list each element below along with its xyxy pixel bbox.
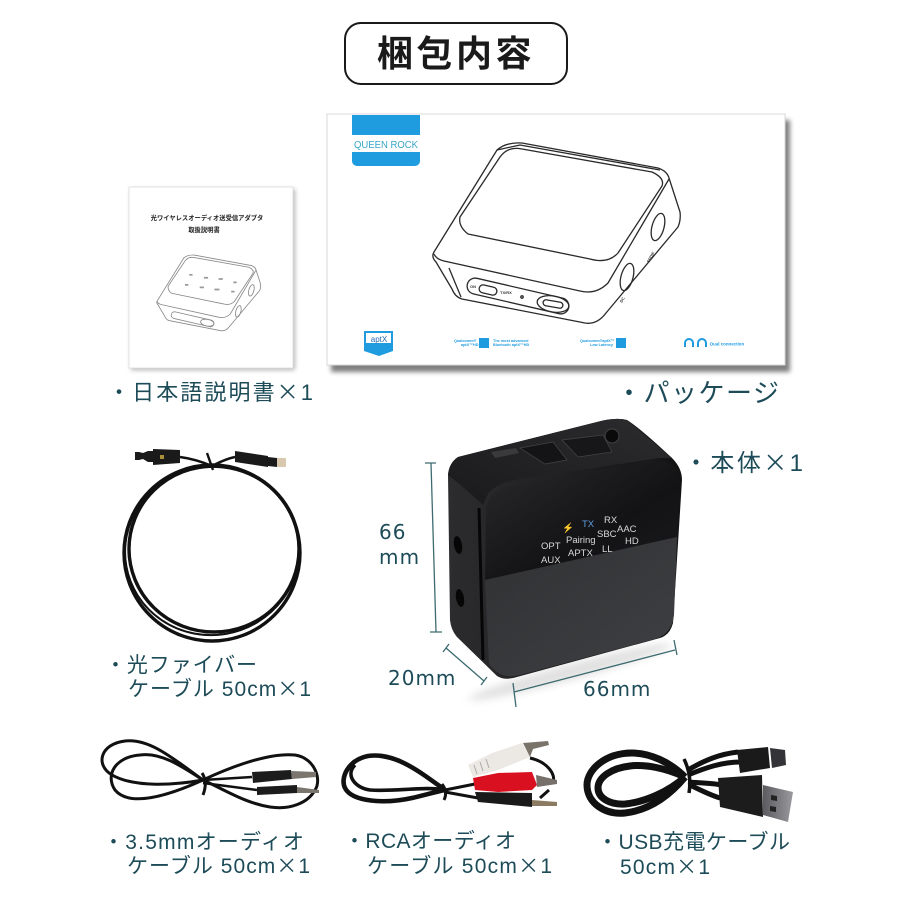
dimension: depth 20mm: 20mm <box>388 666 456 690</box>
label: package: ・パッケージ <box>616 378 779 408</box>
package port labels: ON <box>470 284 476 289</box>
label: main unit: ・本体×1 <box>684 443 803 478</box>
label: RCA cable: ケーブル 50cm×1 <box>367 850 552 880</box>
package feature logos: The most advanced <box>493 339 529 343</box>
package feature logos: Qualcomm®aptX™ <box>580 339 615 343</box>
package port labels: SPDIF <box>646 250 656 264</box>
panel: manual <box>129 187 295 370</box>
label: RCA cable: ・RCAオーディオ <box>344 830 516 853</box>
label: USB cable: ・USB充電ケーブル <box>597 831 790 854</box>
label: RCA cable <box>344 830 552 880</box>
dimension: height 66mm <box>379 463 442 632</box>
device LED labels: OPT <box>541 541 561 552</box>
package feature logos: aptX™HD <box>461 343 479 347</box>
device side and top <box>448 419 682 679</box>
package port labels <box>470 250 656 304</box>
label: 3.5mm cable: ケーブル 50cm×1 <box>127 850 310 880</box>
panel: manual: 光ワイヤレスオーディオ送受信アダプタ <box>151 213 263 222</box>
label: 3.5mm cable: ・3.5mmオーディオ <box>103 831 304 854</box>
package feature logos: Dual connection <box>710 342 744 346</box>
dimension: depth 20mm <box>388 644 487 690</box>
logo: QUEEN ROCK <box>352 115 420 166</box>
label: optical cable <box>105 654 311 703</box>
device LED labels: LL <box>602 544 613 555</box>
package feature logos: Bluetooth aptX™HD <box>493 343 530 347</box>
package line drawing of device <box>433 143 680 323</box>
label: manual: ・日本語説明書×1 <box>108 375 313 407</box>
package port labels: TX/RX <box>500 290 512 295</box>
device LED labels: TX <box>582 519 595 530</box>
dimension: width 66mm <box>513 640 677 707</box>
title: 梱包内容 <box>377 33 535 74</box>
dimension: width 66mm: 66mm <box>583 677 651 701</box>
manual line drawing of device <box>157 255 261 331</box>
RCA audio cable <box>344 741 557 807</box>
3.5mm audio cable <box>102 741 319 808</box>
panel: manual: 取扱説明書 <box>188 225 220 234</box>
title <box>345 23 567 84</box>
package port labels: DC <box>619 296 626 304</box>
dimension: height 66mm: mm <box>379 545 420 569</box>
label: USB cable <box>597 831 790 881</box>
package feature logos <box>364 331 744 356</box>
label: 3.5mm cable <box>103 831 310 880</box>
package feature logos: Low Latency <box>590 343 614 347</box>
label: optical cable: ・光ファイバー <box>105 654 257 677</box>
device LED labels: HD <box>625 536 639 547</box>
USB charging cable <box>587 747 793 822</box>
device: main unit <box>448 419 682 707</box>
device LED labels: APTX <box>568 548 593 559</box>
optical fiber cable <box>112 449 312 649</box>
package feature logos: Qualcomm® <box>454 339 477 343</box>
package feature logos: aptX <box>371 335 388 344</box>
device LED labels: Pairing <box>566 535 596 546</box>
dimension: height 66mm: 66 <box>379 520 406 544</box>
label: optical cable: ケーブル 50cm×1 <box>128 673 311 703</box>
device LED labels: AUX <box>541 555 561 566</box>
device LED labels: ⚡ <box>562 522 574 534</box>
device LED labels <box>541 515 639 566</box>
device LED labels: RX <box>604 515 618 526</box>
device ports <box>452 429 619 608</box>
device LED labels: AAC <box>617 524 637 535</box>
device front face <box>485 460 679 580</box>
logo: QUEEN ROCK: QUEEN ROCK <box>354 139 418 151</box>
panel: package <box>327 114 790 372</box>
device LED labels: SBC <box>597 529 617 540</box>
label: USB cable: 50cm×1 <box>620 851 710 881</box>
